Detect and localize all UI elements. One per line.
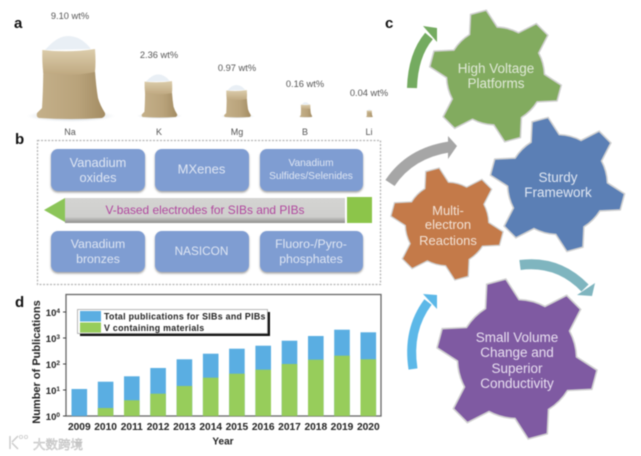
abundance values: 0.04 wt% <box>350 88 388 98</box>
x axis years: 2020 <box>357 422 380 433</box>
label b: b <box>15 131 24 148</box>
box: MXenes <box>155 149 249 191</box>
label a: a <box>14 15 23 32</box>
sack: Na <box>27 36 115 122</box>
y axis title: Number of Publications <box>31 300 43 424</box>
abundance values: 2.36 wt% <box>140 50 178 60</box>
sack: Li <box>365 109 374 117</box>
gear: Small Volume Change and Superior Conductivity: Small Volume <box>476 330 558 345</box>
box: Vanadium Sulfides/Selenides <box>260 149 363 191</box>
legend: V containing materials <box>104 323 204 333</box>
y axis ticks and labels: 4 <box>56 308 60 315</box>
y axis ticks and labels: 10 <box>46 334 56 345</box>
sack: Mg <box>220 85 255 119</box>
sack: K <box>137 74 182 119</box>
y axis ticks and labels: 0 <box>56 412 60 419</box>
gear: High Voltage Platforms: High Voltage <box>458 61 534 76</box>
central bar arrow <box>44 197 372 223</box>
x axis years: 2015 <box>226 422 249 433</box>
arrow: green <box>412 26 437 88</box>
y axis ticks and labels: 1 <box>56 386 60 393</box>
element names: Na <box>64 127 76 137</box>
arrow: light blue <box>412 294 437 369</box>
gear: Multi-electron Reactions: Multi- <box>432 203 464 218</box>
gear: Small Volume Change and Superior Conductivity: Conductivity <box>480 376 554 391</box>
y axis ticks and labels: 3 <box>56 334 60 341</box>
box: Vanadium Sulfides/Selenides: Sulfides/Selenides <box>269 171 353 182</box>
dashed frame <box>38 140 380 284</box>
x axis years: 2017 <box>278 422 301 433</box>
arrow: teal <box>520 264 595 296</box>
x axis years: 2018 <box>304 422 327 433</box>
box: Vanadium bronzes <box>51 231 145 272</box>
x axis years <box>68 422 380 433</box>
box: Vanadium bronzes: bronzes <box>76 252 120 266</box>
box: Fluoro-/Pyro-phosphates <box>260 231 363 272</box>
gear: Sturdy Framework: Sturdy <box>538 170 578 185</box>
y axis ticks and labels: 10 <box>46 308 56 319</box>
x axis years: 2010 <box>94 422 117 433</box>
watermark <box>10 435 83 452</box>
box: Vanadium bronzes: Vanadium <box>71 237 125 251</box>
box: Vanadium oxides: oxides <box>80 170 116 185</box>
y axis ticks and labels: 10 <box>46 360 56 371</box>
x axis years: 2011 <box>121 422 143 433</box>
element names: Li <box>365 127 373 137</box>
central bar arrow: V-based electrodes for SIBs and PIBs <box>106 203 305 217</box>
gear: Small Volume Change and Superior Conductivity: Change and <box>480 345 554 360</box>
panel a: element abundance sacks <box>14 11 388 137</box>
panel c: gears and arrows <box>379 0 639 451</box>
gear: Small Volume Change and Superior Conductivity: Superior <box>491 361 543 376</box>
element names <box>64 127 373 137</box>
x axis title: Year <box>212 436 234 448</box>
x axis years: 2012 <box>147 422 170 433</box>
y axis ticks and labels: 2 <box>56 360 60 367</box>
box: Vanadium oxides: Vanadium <box>70 155 126 170</box>
box: Fluoro-/Pyro-phosphates: Fluoro-/Pyro- <box>275 237 347 251</box>
box: Fluoro-/Pyro-phosphates: phosphates <box>279 252 343 266</box>
gear: Small Volume Change and Superior Conductivity <box>420 267 614 451</box>
arrow: grey <box>390 136 457 183</box>
watermark: 大数跨境 <box>33 437 83 452</box>
legend: Total publications for SIBs and PIBs <box>104 312 266 322</box>
x axis years: 2013 <box>173 422 196 433</box>
gear: High Voltage Platforms: Platforms <box>467 76 525 91</box>
abundance values: 9.10 wt% <box>51 11 89 21</box>
box: NASICON: NASICON <box>175 244 228 258</box>
x axis years: 2014 <box>199 422 222 433</box>
panel b: V-based electrode families <box>15 131 380 284</box>
gear: Multi-electron Reactions <box>379 159 515 289</box>
box: MXenes: MXenes <box>178 162 226 176</box>
gear: Sturdy Framework <box>476 107 639 262</box>
abundance values: 0.97 wt% <box>218 63 256 73</box>
box: NASICON <box>155 231 249 272</box>
gear: High Voltage Platforms <box>416 0 575 152</box>
x axis years: 2009 <box>68 422 91 433</box>
label d: d <box>15 294 24 311</box>
element names: K <box>156 127 162 137</box>
abundance values <box>51 11 388 98</box>
y axis ticks and labels: 10 <box>46 386 56 397</box>
x axis years: 2019 <box>331 422 354 433</box>
element names: Mg <box>231 127 243 137</box>
y axis ticks and labels <box>46 308 66 423</box>
gear: Multi-electron Reactions: Reactions <box>419 233 477 248</box>
abundance values: 0.16 wt% <box>286 79 324 89</box>
label c: c <box>385 15 393 32</box>
bars: total publications <box>72 330 376 416</box>
box: Vanadium Sulfides/Selenides: Vanadium <box>288 158 334 169</box>
gear: Multi-electron Reactions: electron <box>425 217 471 232</box>
gear: Sturdy Framework: Framework <box>524 185 592 200</box>
sack: B <box>298 102 314 118</box>
panel d: publications chart <box>15 294 381 448</box>
y axis ticks and labels: 10 <box>46 412 56 423</box>
bars: V containing materials <box>98 356 376 416</box>
element names: B <box>302 127 308 137</box>
legend <box>78 310 270 336</box>
chart frame <box>66 294 381 416</box>
x axis years: 2016 <box>252 422 275 433</box>
box: Vanadium oxides <box>51 149 145 191</box>
